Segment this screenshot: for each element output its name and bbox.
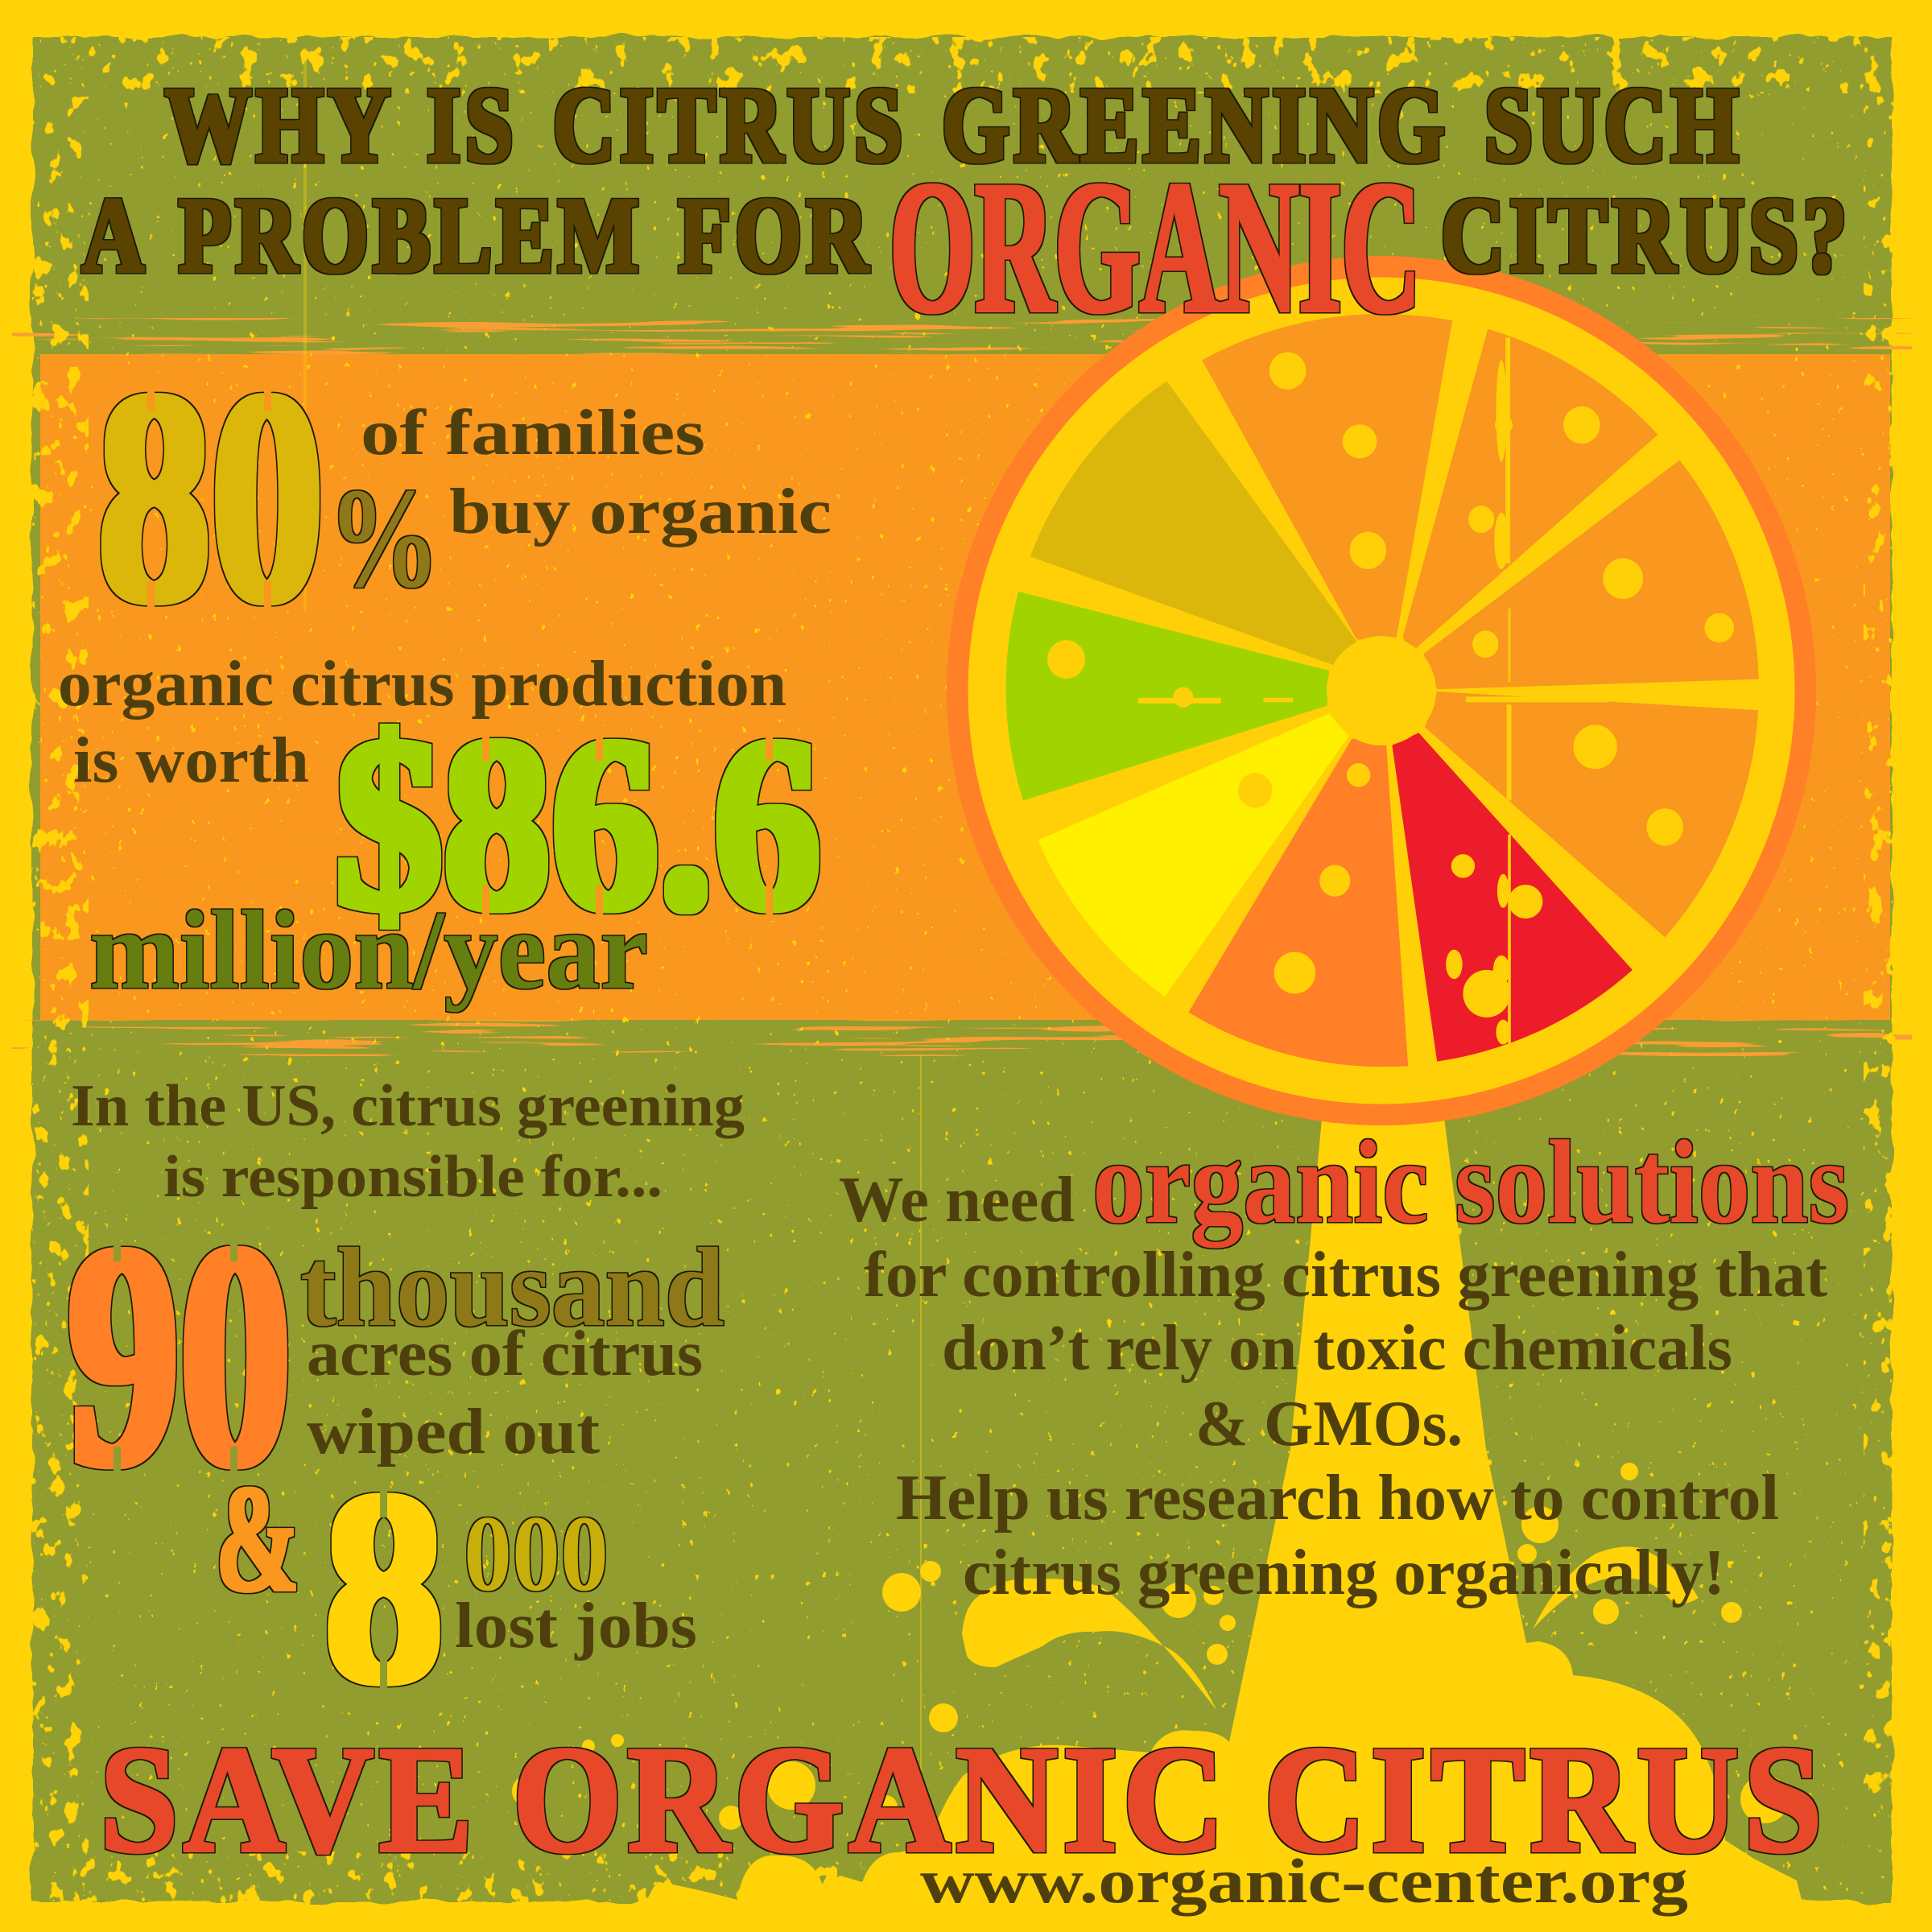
right juice splash: [1533, 1546, 1699, 1629]
text: GMOs: & GMOs.: [1195, 1389, 1463, 1459]
ampersand: &: [216, 1455, 299, 1624]
big number 86.6: $86.6: [335, 687, 821, 960]
text: citrus greening organically: citrus greening organically!: [963, 1538, 1725, 1608]
text block: call to action: [839, 1117, 1849, 1608]
segment: upper right orange: [1403, 329, 1657, 654]
text: don't rely on toxic chemicals: don’t rely on toxic chemicals: [942, 1313, 1732, 1384]
text: million/year: million/year: [89, 888, 648, 1013]
segment: red: [1392, 733, 1633, 1062]
text: organic citrus production: organic citrus production: [58, 649, 786, 720]
tree trunk and juice splash: [512, 1111, 1803, 1906]
footer url: www.organic-center.org: [920, 1846, 1688, 1916]
big number 80: 80: [98, 330, 324, 664]
text: help us research: Help us research how to control: [896, 1463, 1779, 1534]
distress: vertical scratch left: [303, 48, 307, 612]
text: lost jobs: lost jobs: [455, 1591, 697, 1662]
text: of families: of families: [361, 398, 705, 469]
percent sign: %: [328, 458, 440, 617]
text: we need: We need: [839, 1165, 1075, 1236]
big number 90: 90: [68, 1179, 291, 1531]
title line 2 start: A PROBLEM FOR: [82, 175, 873, 295]
wheel segments: [1006, 314, 1759, 1067]
text: in the US intro: [71, 1073, 745, 1210]
stat: market value: [58, 649, 821, 1013]
segment: top orange: [1202, 314, 1452, 640]
stat: 80 percent of families: [98, 330, 832, 664]
stat: 90 thousand acres: [68, 1179, 724, 1531]
text: acres of citrus: acres of citrus: [307, 1319, 703, 1389]
wheel pith ring: [968, 277, 1795, 1104]
panel: orange band: [40, 354, 1890, 1020]
wheel rind: [947, 256, 1816, 1125]
intro line 1: In the US, citrus greening: [71, 1073, 745, 1139]
orange streaks above band: [12, 318, 1912, 354]
distress: bottom edge: [32, 1852, 837, 1905]
wheel hub: [1327, 636, 1436, 745]
text: for controlling citrus greening that: for controlling citrus greening that: [864, 1240, 1827, 1311]
distress: top edge: [32, 37, 1892, 93]
orange streaks below band: [12, 1020, 1912, 1056]
segment: right orange: [1423, 460, 1759, 689]
trunk with cloud base: [644, 1111, 1803, 1906]
icon: citrus wheel: [947, 256, 1816, 1125]
text: thousand: thousand: [300, 1225, 724, 1350]
text: wiped out: wiped out: [307, 1397, 600, 1468]
text: buy organic: buy organic: [449, 477, 832, 547]
segment: dark orange: [1188, 738, 1408, 1067]
distress: right edge: [1864, 97, 1896, 1852]
text: organic solutions: organic solutions: [1092, 1117, 1849, 1249]
text: is worth: is worth: [73, 725, 309, 796]
footer heading: save organic citrus: SAVE ORGANIC CITRUS: [100, 1715, 1827, 1885]
juice droplets: [512, 1463, 1789, 1830]
title line 2 end: CITRUS?: [1441, 175, 1852, 295]
left juice splash: [962, 1579, 1216, 1710]
segment: green: [1006, 592, 1329, 800]
segment: olive: [1030, 381, 1356, 665]
segment: yellow: [1038, 713, 1349, 997]
big number 8: 8: [324, 1435, 444, 1739]
segment: lower right orange: [1425, 691, 1758, 937]
title word: ORGANIC: ORGANIC: [890, 142, 1421, 353]
text: 000: 000: [464, 1494, 609, 1614]
intro line 2: is responsible for...: [163, 1144, 663, 1210]
distress: vertical scratch lower: [920, 1055, 922, 1779]
distress: left edge: [32, 97, 89, 1852]
stat: 8000 lost jobs: [216, 1435, 697, 1739]
